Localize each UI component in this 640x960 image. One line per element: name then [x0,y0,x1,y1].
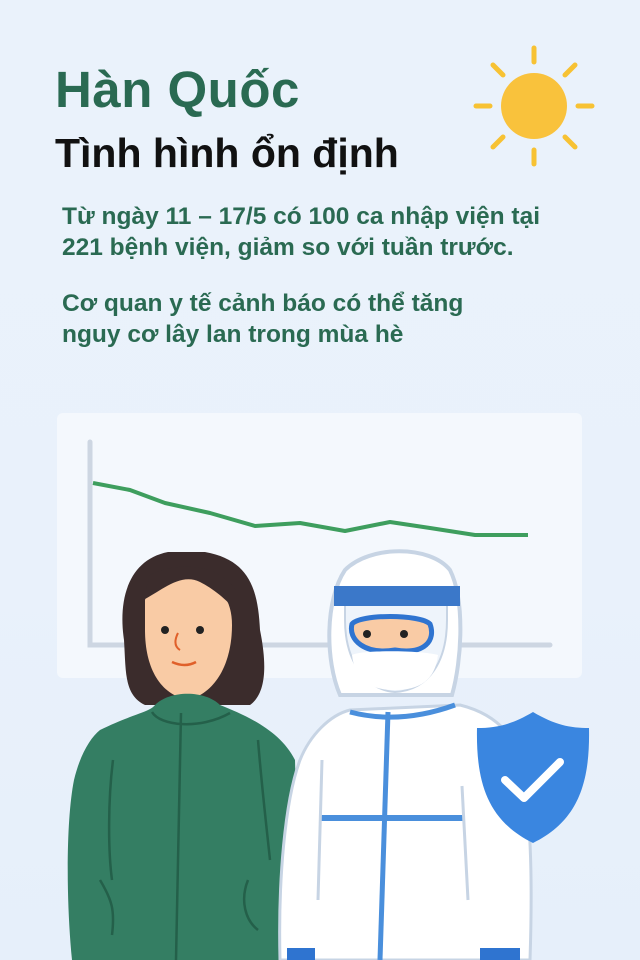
text block: hospital stats: 221 bệnh viện, giảm so với tuần trước. [62,234,514,261]
title: Hàn Quốc [55,61,300,118]
text block: warning [62,290,463,348]
chart axes [90,442,550,645]
subtitle: Tình hình ổn định [55,130,399,176]
icon: shield with check [477,712,589,843]
text block: hospital stats: Từ ngày 11 – 17/5 có 100 ca nhập viện tại [62,203,540,230]
text block: warning: nguy cơ lây lan trong mùa hè [62,321,403,348]
text block: hospital stats [62,203,540,261]
chart line: declining [93,483,528,535]
person: woman in green jacket [68,552,300,960]
text block: warning: Cơ quan y tế cảnh báo có thể tăng [62,290,463,317]
person: health worker in protective suit [280,551,531,960]
icon: sun [474,46,594,166]
